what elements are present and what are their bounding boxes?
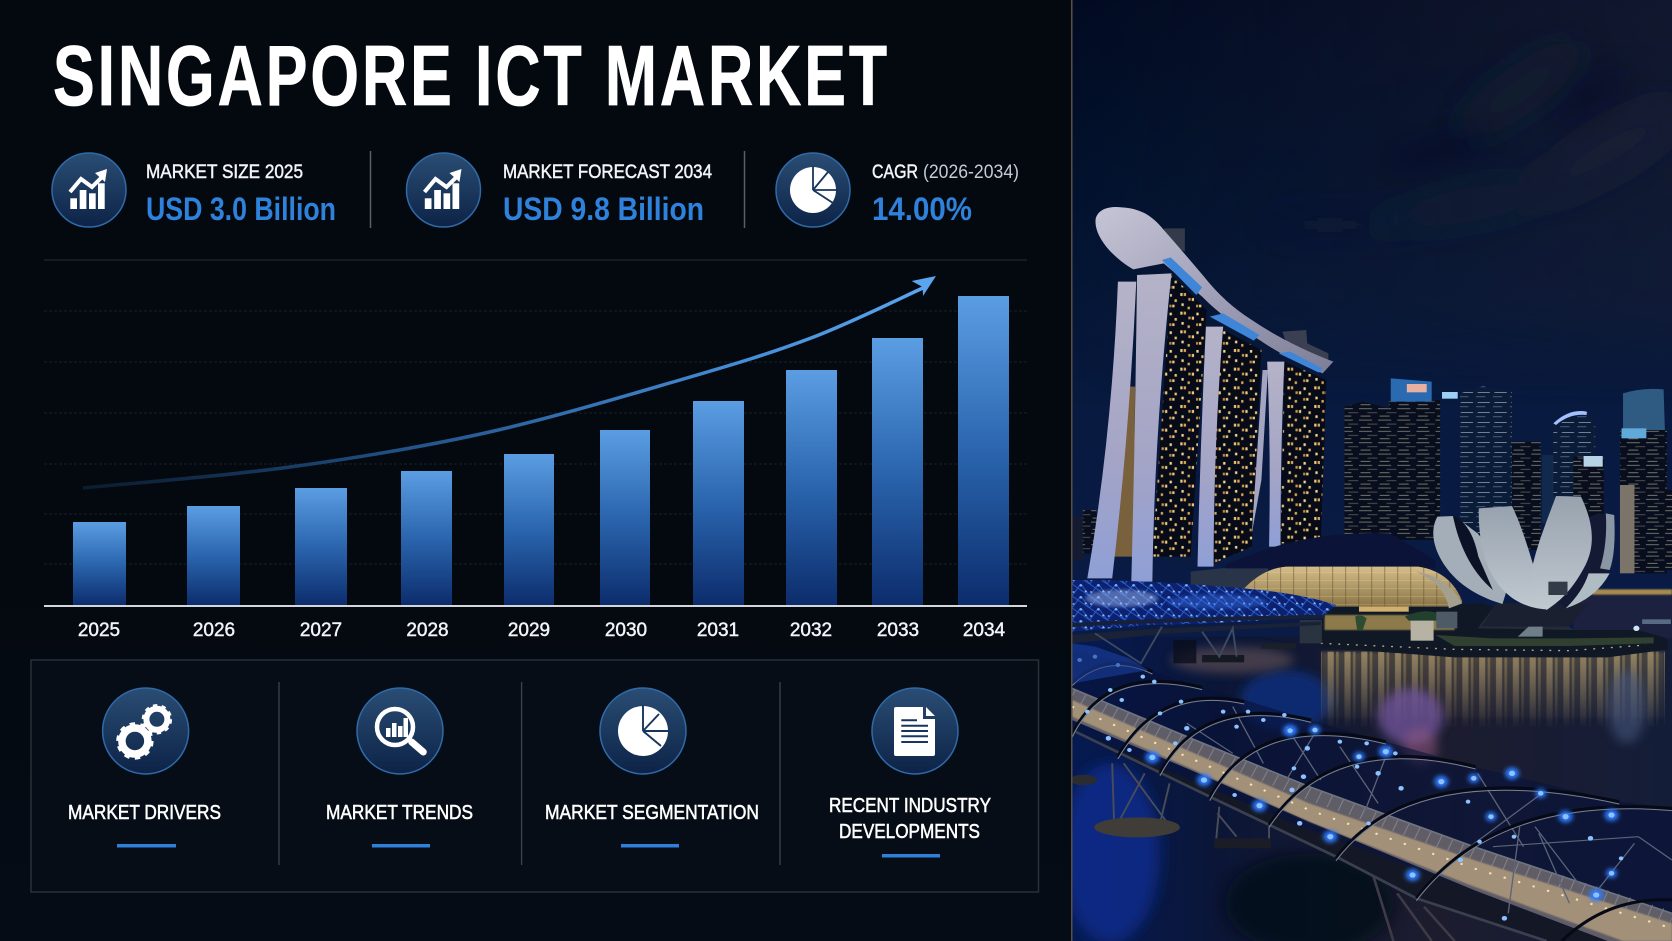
KPI: CAGR xyxy=(776,153,1019,227)
KPI: market forecast 2034 xyxy=(406,153,712,227)
label: recent industry developments: RECENT INDUSTRY xyxy=(829,794,991,817)
skyline and Marina Bay Sands xyxy=(1072,207,1672,582)
icon: segmentation pie xyxy=(600,688,686,774)
value: market forecast: USD 9.8 Billion xyxy=(503,191,704,227)
year labels: 2030 xyxy=(605,620,647,641)
label: CAGR period: (2026-2034) xyxy=(923,161,1019,183)
year labels: 2029 xyxy=(508,620,550,641)
promenade island xyxy=(1321,603,1668,657)
label: market forecast: MARKET FORECAST 2034 xyxy=(503,161,712,183)
water and waterfront xyxy=(1061,589,1672,941)
expo dome and ArtScience Museum xyxy=(1191,496,1615,627)
value: CAGR: 14.00% xyxy=(872,191,972,227)
left panel background xyxy=(0,0,1072,941)
tube interior xyxy=(1072,650,1672,941)
office towers xyxy=(1344,378,1672,573)
deck xyxy=(1072,730,1608,941)
year labels: 2032 xyxy=(790,620,832,641)
sky and clouds xyxy=(1072,0,1672,637)
skypark deck xyxy=(1095,207,1333,373)
label: market drivers: MARKET DRIVERS xyxy=(68,801,221,824)
icon: document xyxy=(872,688,958,774)
icon: magnifier chart xyxy=(357,688,443,774)
upper helix bridge xyxy=(1072,580,1336,663)
far left buildings xyxy=(1072,517,1083,560)
accent: segmentation xyxy=(621,844,679,848)
label: market segmentation: MARKET SEGMENTATION xyxy=(545,801,759,824)
dark pier shadows xyxy=(1173,640,1196,663)
year labels: 2028 xyxy=(406,620,449,641)
value: market size: USD 3.0 Billion xyxy=(146,191,336,227)
icon: gears xyxy=(103,688,189,774)
left blue water xyxy=(1061,763,1160,941)
warm reflections xyxy=(1321,652,1665,727)
icon: growth chart xyxy=(52,153,126,227)
blue lights xyxy=(1077,655,1623,921)
blue lights glow xyxy=(1145,725,1618,901)
lower helix bridge xyxy=(1070,643,1672,941)
struts xyxy=(1187,707,1672,913)
purple reflection xyxy=(1378,688,1443,745)
KPI: market size 2025 xyxy=(52,153,336,227)
label: recent industry developments xyxy=(829,794,991,843)
icon: forecast growth chart xyxy=(406,153,480,227)
label: market trends: MARKET TRENDS xyxy=(326,801,473,824)
year labels: 2034 xyxy=(963,620,1006,641)
label: recent industry developments: DEVELOPMENTS xyxy=(839,820,980,843)
year labels: 2027 xyxy=(300,620,342,641)
bar chart xyxy=(44,260,1027,641)
bars xyxy=(73,296,1009,606)
panel: Singapore night photo illustration xyxy=(1072,0,1672,941)
year labels xyxy=(78,620,1006,641)
year labels: 2031 xyxy=(697,620,739,641)
museum xyxy=(1481,603,1589,627)
icon: pie chart xyxy=(776,153,850,227)
MBS towers xyxy=(1087,273,1326,582)
year labels: 2033 xyxy=(877,620,919,641)
label: market size: MARKET SIZE 2025 xyxy=(146,161,303,183)
panel: market topics xyxy=(31,660,1038,892)
photo divider line xyxy=(1071,0,1072,941)
label: CAGR: CAGR xyxy=(872,161,918,183)
year labels: 2026 xyxy=(193,620,235,641)
arches xyxy=(1072,663,1672,941)
accent: trends xyxy=(372,844,430,848)
supports xyxy=(1070,763,1455,941)
far bridge blue section xyxy=(1072,643,1149,683)
accent: drivers xyxy=(117,844,176,848)
arrow: growth trend xyxy=(83,276,936,488)
year labels: 2025 xyxy=(78,620,120,641)
title: SINGAPORE ICT MARKET xyxy=(53,29,890,124)
accent: developments xyxy=(882,854,940,858)
